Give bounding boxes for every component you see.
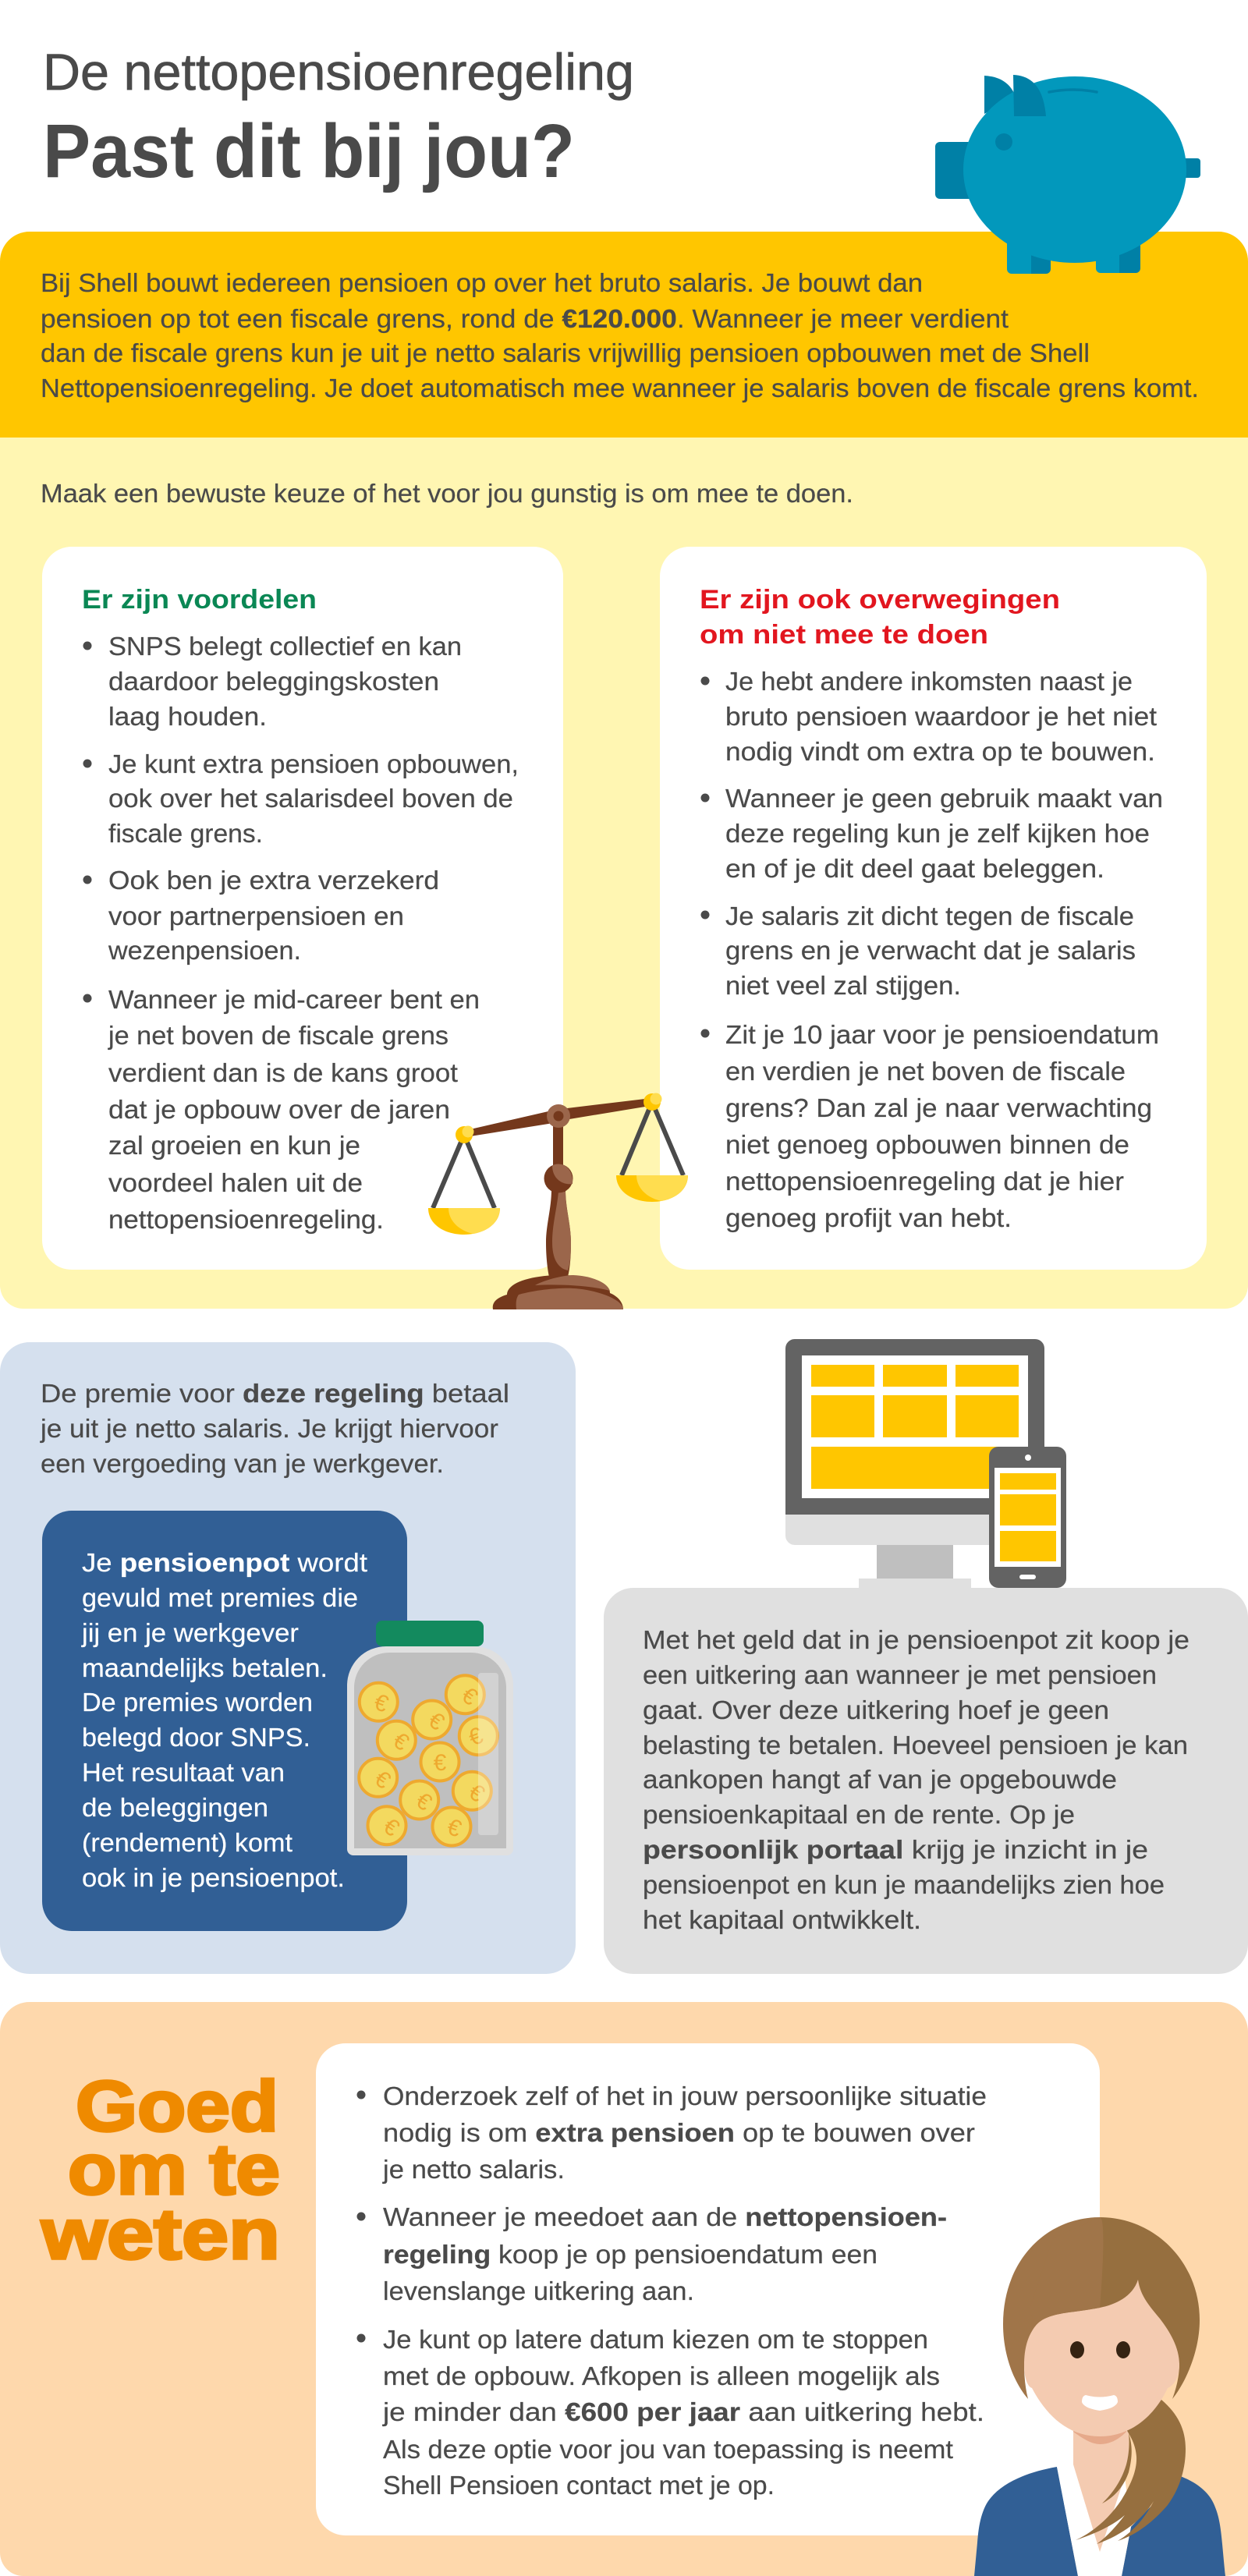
heading: good to know: om te bbox=[68, 2130, 280, 2209]
panel: introduction bbox=[0, 232, 1248, 438]
text: premium: een vergoeding van je werkgever. bbox=[41, 1449, 444, 1478]
title: De nettopensioenregeling bbox=[43, 43, 634, 101]
heading: good to know: Goed bbox=[76, 2067, 278, 2146]
text: conscious choice: Maak een bewuste keuze of het voor jou gunstig is om mee te doen. bbox=[41, 479, 853, 508]
card: good to know: levenslange uitkering aan. bbox=[383, 2277, 694, 2305]
list: advantages: voordeel halen uit de bbox=[108, 1168, 363, 1197]
card: pension pot: ook in je pensioenpot. bbox=[82, 1863, 345, 1892]
icon: coin jar: € bbox=[411, 1788, 437, 1816]
text: pension payout: aankopen hangt af van je opgebouwde bbox=[643, 1765, 1117, 1794]
text: introduction: Bij Shell bouwt iedereen pensioen op over het bruto salaris. Je bouwt dan bbox=[41, 268, 923, 297]
text: pension payout: gaat. Over deze uitkering hoef je geen bbox=[643, 1695, 1109, 1724]
text: introduction: Nettopensioenregeling. Je doet automatisch mee wanneer je salaris boven de fiscale grens komt. bbox=[41, 374, 1199, 402]
icon: coin jar: € bbox=[378, 1813, 404, 1842]
card: good to know: je netto salaris. bbox=[382, 2155, 565, 2184]
list: advantages: voor partnerpensioen en bbox=[108, 902, 404, 930]
list: considerations: nettopensioenregeling dat je hier bbox=[725, 1167, 1124, 1196]
list: advantages: wezenpensioen. bbox=[108, 936, 301, 965]
card: good to know: Als deze optie voor jou van toepassing is neemt bbox=[383, 2435, 953, 2464]
card: good to know: nodig is om extra pensioen op te bouwen over bbox=[383, 2118, 975, 2147]
card: good to know: Onderzoek zelf of het in jouw persoonlijke situatie bbox=[383, 2082, 987, 2110]
text: premium: De premie voor deze regeling betaal bbox=[41, 1379, 509, 1408]
list: advantages: nettopensioenregeling. bbox=[108, 1205, 384, 1234]
list: advantages bbox=[83, 632, 519, 1234]
card: pension pot: de beleggingen bbox=[82, 1793, 268, 1822]
list: considerations bbox=[700, 667, 1163, 1232]
icon: coin jar: € bbox=[466, 1723, 487, 1751]
heading: considerations: Er zijn ook overwegingen bbox=[700, 585, 1060, 615]
list: considerations: niet genoeg opbouwen binnen de bbox=[725, 1130, 1129, 1159]
icon: coin jar: € bbox=[370, 1766, 395, 1795]
icon: coin jar: € bbox=[463, 1779, 489, 1808]
panel: good to know bbox=[0, 2002, 1248, 2576]
text: pension payout: pensioenkapitaal en de rente. Op je bbox=[643, 1800, 1075, 1829]
list: advantages: fiscale grens. bbox=[108, 819, 263, 848]
list: considerations: Zit je 10 jaar voor je pensioendatum bbox=[725, 1020, 1159, 1049]
card: good to know bbox=[316, 2043, 1100, 2535]
title bbox=[43, 43, 634, 193]
list: considerations: en verdien je net boven de fiscale bbox=[725, 1057, 1126, 1086]
title: Past dit bij jou? bbox=[43, 108, 575, 193]
list: advantages: Wanneer je mid-career bent en bbox=[108, 985, 480, 1014]
card: pension pot: gevuld met premies die bbox=[82, 1583, 358, 1612]
text: pension payout: Met het geld dat in je pensioenpot zit koop je bbox=[643, 1625, 1190, 1654]
list: considerations: en of je dit deel gaat beleggen. bbox=[725, 854, 1104, 883]
list: advantages: dat je opbouw over de jaren bbox=[108, 1095, 450, 1124]
icon: piggy bank bbox=[935, 75, 1200, 274]
card: pension pot: belegd door SNPS. bbox=[82, 1723, 310, 1752]
text: introduction: dan de fiscale grens kun je uit je netto salaris vrijwillig pensioen opbouwen met de Shell bbox=[41, 338, 1090, 367]
heading: considerations bbox=[700, 585, 1060, 650]
list: considerations: niet veel zal stijgen. bbox=[725, 971, 961, 1000]
card: pension pot: De premies worden bbox=[82, 1688, 313, 1717]
icon: coin jar: € bbox=[434, 1750, 447, 1776]
heading: good to know bbox=[41, 2067, 280, 2274]
list: advantages: daardoor beleggingskosten bbox=[108, 667, 439, 696]
icon: desktop and phone bbox=[785, 1339, 1066, 1588]
card: good to know: je minder dan €600 per jaar aan uitkering hebt. bbox=[382, 2397, 984, 2426]
text: premium bbox=[40, 1379, 509, 1478]
card: good to know: Wanneer je meedoet aan de nettopensioen- bbox=[383, 2202, 947, 2231]
icon: woman bbox=[974, 2217, 1225, 2576]
card: pension pot: (rendement) komt bbox=[82, 1828, 292, 1857]
list: advantages: laag houden. bbox=[108, 702, 267, 731]
heading: good to know: weten bbox=[41, 2195, 280, 2274]
text: pension payout: het kapitaal ontwikkelt. bbox=[643, 1905, 921, 1934]
icon: balance scale bbox=[428, 1093, 688, 1309]
card: good to know: Shell Pensioen contact met je op. bbox=[383, 2471, 775, 2500]
list: considerations: deze regeling kun je zelf kijken hoe bbox=[725, 819, 1150, 848]
list: advantages: Je kunt extra pensioen opbouwen, bbox=[108, 749, 519, 778]
text: pension payout: pensioenpot en kun je maandelijks zien hoe bbox=[643, 1870, 1165, 1899]
panel: premium bbox=[0, 1342, 576, 1974]
card: pension pot: Je pensioenpot wordt bbox=[82, 1548, 367, 1577]
text: premium: je uit je netto salaris. Je krijgt hiervoor bbox=[40, 1414, 498, 1443]
card: pension pot: Het resultaat van bbox=[82, 1758, 285, 1787]
icon: coin jar: € bbox=[388, 1727, 413, 1756]
text: introduction bbox=[41, 268, 1199, 402]
list: considerations: Je hebt andere inkomsten naast je bbox=[725, 667, 1133, 696]
list: advantages: zal groeien en kun je bbox=[108, 1131, 360, 1160]
list: considerations: grens? Dan zal je naar verwachting bbox=[725, 1093, 1152, 1122]
icon: coin jar: € bbox=[424, 1707, 449, 1736]
panel: pension payout bbox=[604, 1588, 1248, 1974]
list: considerations: bruto pensioen waardoor je het niet bbox=[725, 702, 1157, 731]
heading: advantages: Er zijn voordelen bbox=[82, 585, 317, 615]
icon: coin jar bbox=[347, 1621, 513, 1855]
card: good to know: regeling koop je op pensioendatum een bbox=[383, 2240, 878, 2269]
text: pension payout bbox=[643, 1625, 1190, 1934]
text: pension payout: belasting te betalen. Hoeveel pensioen je kan bbox=[643, 1731, 1188, 1759]
heading: considerations: om niet mee te doen bbox=[700, 620, 988, 650]
card: pension pot: maandelijks betalen. bbox=[82, 1653, 328, 1682]
panel: advantages bbox=[42, 547, 563, 1270]
list: considerations: grens en je verwacht dat je salaris bbox=[725, 936, 1136, 965]
list: advantages: Ook ben je extra verzekerd bbox=[108, 866, 439, 895]
card: pension pot bbox=[42, 1511, 407, 1931]
card: pension pot: jij en je werkgever bbox=[81, 1618, 299, 1647]
panel: choice background bbox=[0, 438, 1248, 1309]
list: advantages: SNPS belegt collectief en kan bbox=[108, 632, 462, 661]
list: considerations: Wanneer je geen gebruik maakt van bbox=[725, 784, 1163, 813]
list: advantages: je net boven de fiscale grens bbox=[108, 1021, 448, 1050]
list: considerations: Je salaris zit dicht tegen de fiscale bbox=[725, 902, 1134, 930]
list: considerations: nodig vindt om extra op te bouwen. bbox=[725, 737, 1155, 766]
icon: coin jar: € bbox=[370, 1689, 392, 1718]
text: introduction: pensioen op tot een fiscale grens, rond de €120.000 . Wanneer je meer verdient bbox=[41, 304, 1009, 333]
panel: considerations bbox=[660, 547, 1207, 1270]
icon: coin jar: € bbox=[456, 1682, 482, 1711]
card: good to know: Je kunt op latere datum kiezen om te stoppen bbox=[383, 2325, 928, 2354]
list: advantages: ook over het salarisdeel boven de bbox=[108, 784, 513, 813]
text: pension payout: persoonlijk portaal krijg je inzicht in je bbox=[643, 1835, 1148, 1864]
list: advantages: verdient dan is de kans groot bbox=[108, 1058, 458, 1087]
card: good to know: met de opbouw. Afkopen is alleen mogelijk als bbox=[383, 2362, 940, 2390]
icon: coin jar: € bbox=[444, 1814, 465, 1843]
list: considerations: genoeg profijt van hebt. bbox=[725, 1203, 1012, 1232]
text: pension payout: een uitkering aan wanneer je met pensioen bbox=[643, 1660, 1157, 1689]
